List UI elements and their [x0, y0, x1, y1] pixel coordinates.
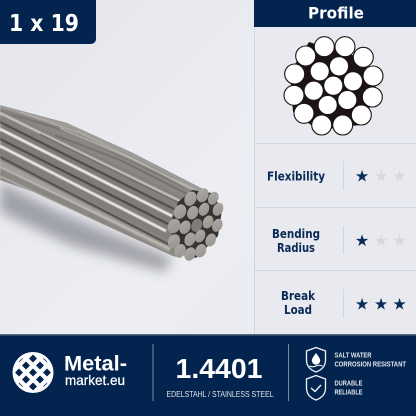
- cut wire discs: [165, 186, 225, 263]
- strand 3: [0, 148, 172, 234]
- rating: Flexibility: Flexibility: [267, 170, 325, 184]
- rating: Flexibility: ★: [392, 166, 407, 186]
- rating: Break Load: ★: [392, 294, 407, 314]
- rating: Break Load: ★: [355, 294, 369, 314]
- cable shadow: [0, 182, 172, 272]
- strand 2: [0, 131, 178, 220]
- panel: profile: [254, 0, 416, 335]
- wire cross-section diagram: [284, 37, 383, 135]
- brand: Metal-market.eu: [64, 352, 127, 388]
- lower twisted strands: [0, 157, 170, 245]
- cut end: dark core: [170, 190, 222, 258]
- rating: Flexibility: [267, 166, 407, 186]
- dividers: [254, 143, 416, 318]
- material number: EDELSTAHL / STAINLESS STEEL: [166, 390, 274, 399]
- divider: [152, 344, 154, 401]
- rating: Flexibility: ★: [374, 166, 388, 186]
- rating: Break Load: Load: [284, 303, 312, 317]
- icon: shield with check: [306, 376, 326, 400]
- rating: Bending Radius: [272, 227, 407, 255]
- material number: 1.4401: [176, 353, 262, 384]
- badge: 1 x 19: [0, 0, 96, 44]
- rating: Bending Radius: ★: [355, 231, 369, 250]
- rating: Break Load: ★: [374, 294, 388, 314]
- text: durable reliable: [334, 380, 363, 396]
- rating: Bending Radius: Radius: [277, 241, 315, 255]
- rating: Bending Radius: ★: [374, 231, 388, 250]
- text: salt water corrosion resistant: SALT WATER: [334, 352, 372, 360]
- rating: Break Load: Break: [281, 289, 316, 303]
- rating: Bending Radius: Bending: [272, 227, 320, 241]
- divider: [288, 344, 289, 401]
- brand: Metal-market.eu: Metal-: [64, 352, 127, 376]
- text: salt water corrosion resistant: [334, 352, 407, 368]
- brand: Metal-market.eu: market.eu: [65, 372, 125, 388]
- steel cable photo: [0, 100, 225, 270]
- rating: Break Load: [281, 289, 407, 317]
- heading: Profile: Profile: [308, 4, 364, 22]
- logo: mesh globe: [12, 352, 54, 393]
- footer band: [0, 334, 416, 416]
- material number: [166, 353, 274, 399]
- rating: Flexibility: ★: [355, 166, 369, 186]
- heading: Profile: [254, 0, 416, 27]
- text: durable reliable: DURABLE: [334, 380, 363, 388]
- badge: 1 x 19: 1 x 19: [9, 9, 79, 37]
- strand 1: [0, 112, 10, 124]
- rating: Bending Radius: ★: [392, 231, 407, 250]
- back twisted strands: [0, 106, 205, 198]
- icon: shield with water drop: [306, 348, 326, 372]
- text: durable reliable: RELIABLE: [334, 390, 363, 396]
